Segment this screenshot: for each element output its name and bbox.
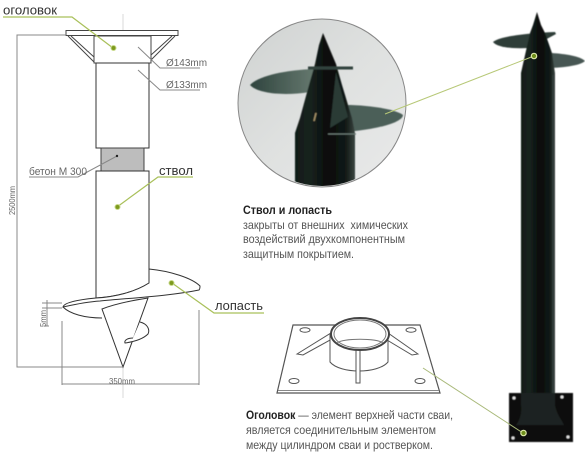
front rib bbox=[356, 350, 360, 383]
dimension labels: бетон М 300 bbox=[29, 166, 87, 178]
base plate bbox=[509, 393, 573, 442]
concrete insert bbox=[101, 148, 144, 171]
facet highlight bbox=[330, 72, 348, 128]
base weld bbox=[516, 393, 564, 425]
callout: ствол bbox=[115, 163, 193, 210]
upper blades bbox=[493, 32, 556, 48]
technical drawing of the pile bbox=[8, 14, 207, 400]
callout: оголовок: оголовок bbox=[3, 2, 57, 18]
collar edge bbox=[328, 133, 356, 135]
top flange bbox=[308, 66, 353, 70]
text block: ствол и лопасть: закрыты от внешних химических bbox=[243, 218, 408, 232]
dimension labels: Ø133mm bbox=[166, 80, 207, 91]
text block: оголовок: Оголовок — элемент верхней части сваи, bbox=[246, 408, 453, 422]
concrete marker bbox=[116, 155, 118, 157]
text block: оголовок: является соединительным элементом bbox=[246, 423, 436, 437]
base plate bbox=[277, 325, 440, 393]
gussets bbox=[297, 333, 418, 355]
dimension labels: 2500mm bbox=[8, 186, 17, 215]
text block: оголовок: между цилиндром сваи и ростверком. bbox=[246, 438, 433, 452]
mounting holes bbox=[289, 328, 425, 384]
shaft edge highlight bbox=[552, 75, 554, 393]
plate holes bbox=[512, 396, 570, 440]
dimension labels: Ø143mm bbox=[166, 58, 207, 69]
upper shaft bbox=[96, 63, 149, 148]
callout: оголовок bbox=[3, 2, 116, 50]
right blade bbox=[348, 104, 404, 132]
glint bbox=[314, 113, 316, 121]
left blade bbox=[250, 69, 315, 94]
ring bbox=[331, 318, 389, 350]
lower shaft and blade bbox=[63, 171, 200, 367]
callout: лопасть bbox=[169, 280, 264, 313]
cylinder bbox=[330, 334, 388, 371]
dimension labels: 350mm bbox=[109, 377, 135, 386]
text block: ствол и лопасть: защитным покрытием. bbox=[243, 247, 354, 261]
dimension labels: 5mm bbox=[39, 310, 48, 327]
circular photo: blade close-up bbox=[238, 19, 406, 190]
connector: head drawing to pile base bbox=[423, 368, 526, 436]
callout: ствол: ствол bbox=[159, 163, 193, 178]
text block: ствол и лопасть: воздействий двухкомпонентным bbox=[243, 232, 405, 246]
text block: ствол и лопасть: Ствол и лопасть bbox=[243, 203, 332, 217]
photo: full pile bbox=[493, 12, 585, 442]
pile head drawing bbox=[66, 30, 178, 63]
pile head line drawing bbox=[277, 318, 440, 393]
text block: ствол и лопасть bbox=[243, 203, 408, 261]
callout: лопасть: лопасть bbox=[215, 298, 263, 313]
dimension lines bbox=[17, 35, 200, 385]
shaft and cone bbox=[295, 33, 355, 190]
text block: оголовок bbox=[246, 408, 453, 452]
connector: photo circle to pile bbox=[385, 53, 537, 114]
shaft bbox=[521, 12, 555, 393]
centre line bbox=[122, 14, 124, 400]
dimension labels bbox=[8, 58, 207, 386]
